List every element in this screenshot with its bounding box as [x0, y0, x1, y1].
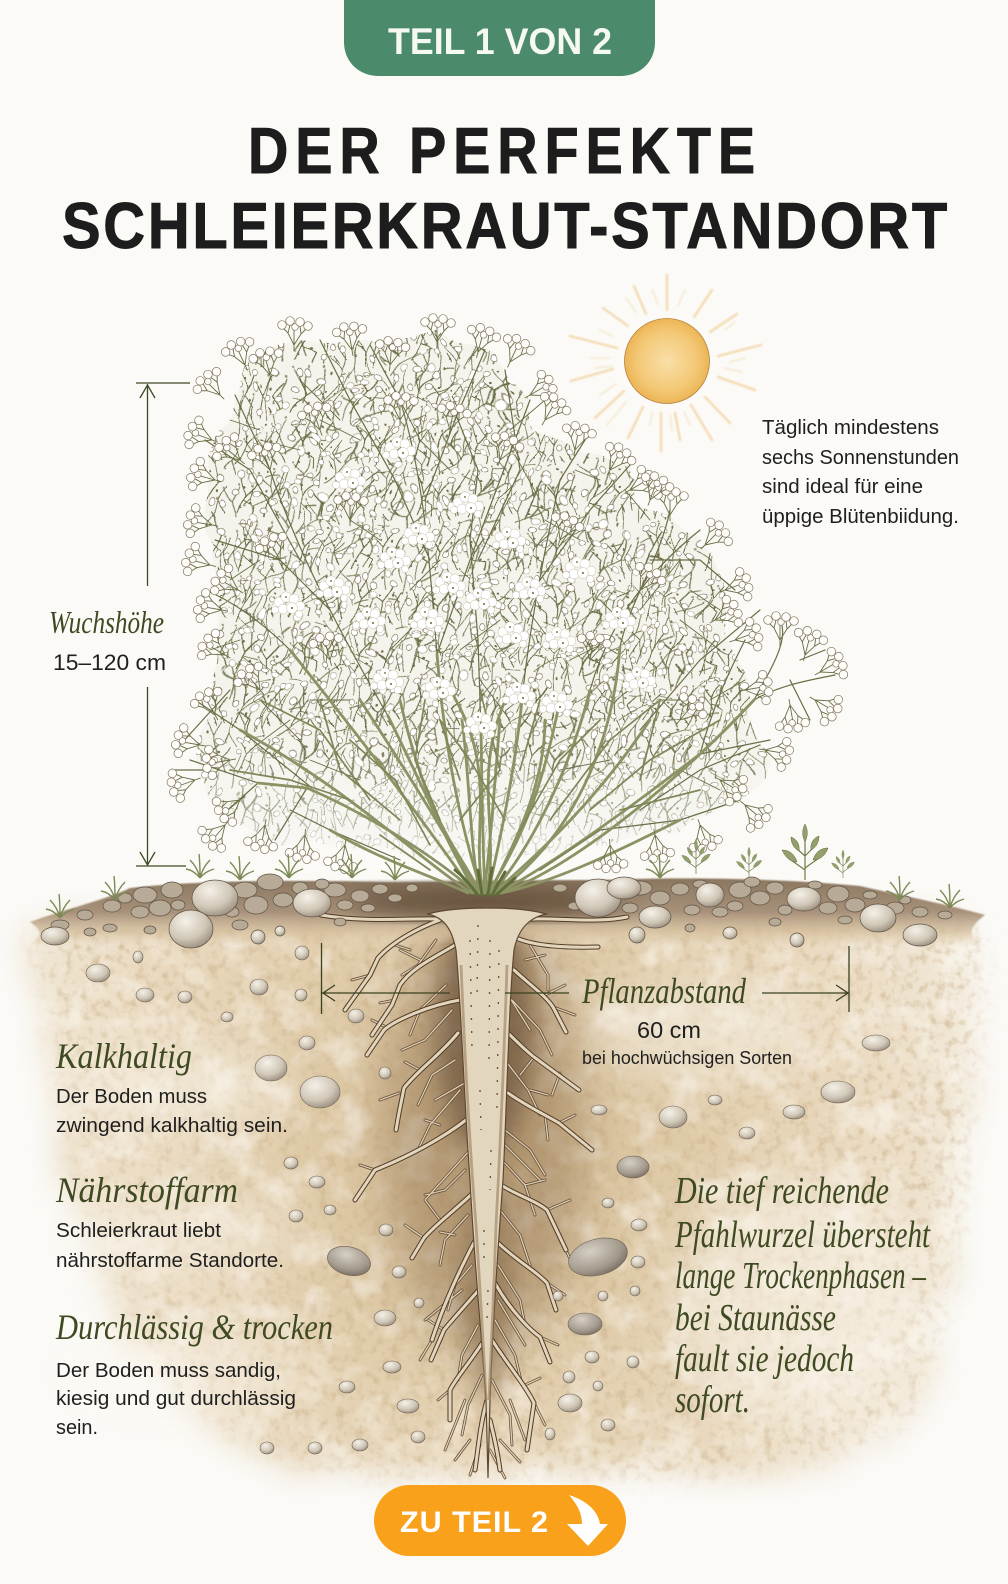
- soil body: [30, 905, 982, 1475]
- text block: Durchlässig und trocken: Durchlässig & trocken: [55, 1307, 333, 1347]
- label: growth height: [49, 604, 166, 675]
- text: sun hours: [762, 417, 959, 528]
- surface stones: [41, 874, 952, 948]
- text block: taproot note: [674, 1170, 931, 1421]
- soil pebbles: [86, 946, 890, 1454]
- text block: Durchlässig und trocken: [55, 1307, 333, 1439]
- text block: Nährstoffarm: Schleierkraut liebt: [56, 1220, 221, 1242]
- button: Zu Teil 2: [374, 1485, 626, 1556]
- title: DER PERFEKTE: [248, 114, 762, 187]
- text: sun hours: üppige Blütenbiidung.: [762, 506, 959, 528]
- icon: curved arrow: [567, 1495, 608, 1546]
- text block: taproot note: Die tief reichende: [674, 1170, 889, 1212]
- text block: Durchlässig und trocken: kiesig und gut durchlässig: [56, 1388, 296, 1410]
- dark shade around the roots: [385, 905, 585, 1355]
- badge: Teil 1 von 2: [344, 0, 655, 76]
- text block: Durchlässig und trocken: sein.: [56, 1417, 98, 1439]
- text: sun hours: sechs Sonnenstunden: [762, 447, 959, 469]
- label: growth height: 15–120 cm: [53, 650, 166, 675]
- label: growth height: Wuchshöhe: [49, 604, 164, 640]
- text block: Nährstoffarm: Nährstoffarm: [55, 1170, 238, 1210]
- arrow: planting distance: [322, 943, 849, 1014]
- badge: Teil 1 von 2: TEIL 1 VON 2: [388, 21, 612, 62]
- text block: Kalkhaltig: Kalkhaltig: [55, 1036, 192, 1076]
- weeds: [46, 824, 964, 918]
- title: [62, 114, 950, 262]
- flower cloud: [195, 334, 765, 860]
- main stems: [240, 647, 754, 893]
- icon: sun: [570, 275, 761, 451]
- text block: Kalkhaltig: [55, 1036, 288, 1137]
- text block: taproot note: Pfahlwurzel übersteht: [674, 1214, 931, 1256]
- plant: baby's breath: [162, 314, 854, 895]
- text block: Nährstoffarm: nährstoffarme Standorte.: [56, 1250, 284, 1272]
- text block: Nährstoffarm: [55, 1170, 284, 1272]
- text block: taproot note: bei Staunässe: [675, 1297, 836, 1339]
- label: planting distance: 60 cm: [637, 1017, 701, 1043]
- text block: Durchlässig und trocken: Der Boden muss sandig,: [56, 1360, 281, 1382]
- label: planting distance: bei hochwüchsigen Sorten: [582, 1048, 792, 1068]
- thin upper branches: [175, 340, 835, 860]
- taproot and lateral roots: [321, 908, 627, 1478]
- text block: taproot note: sofort.: [675, 1379, 750, 1421]
- outer flower sprigs: [162, 314, 854, 876]
- bright central flower clusters: [271, 437, 656, 738]
- arrow: growth height: [136, 383, 190, 866]
- text: sun hours: sind ideal für eine: [762, 476, 923, 498]
- text: sun hours: Täglich mindestens: [762, 417, 939, 439]
- text block: Kalkhaltig: zwingend kalkhaltig sein.: [56, 1115, 288, 1137]
- text block: Kalkhaltig: Der Boden muss: [56, 1086, 207, 1108]
- label: planting distance: [581, 971, 792, 1068]
- button: Zu Teil 2: ZU TEIL 2: [400, 1506, 549, 1539]
- text block: taproot note: fault sie jedoch: [675, 1338, 854, 1380]
- label: planting distance: Pflanzabstand: [581, 971, 747, 1011]
- soil surface band: [26, 878, 988, 946]
